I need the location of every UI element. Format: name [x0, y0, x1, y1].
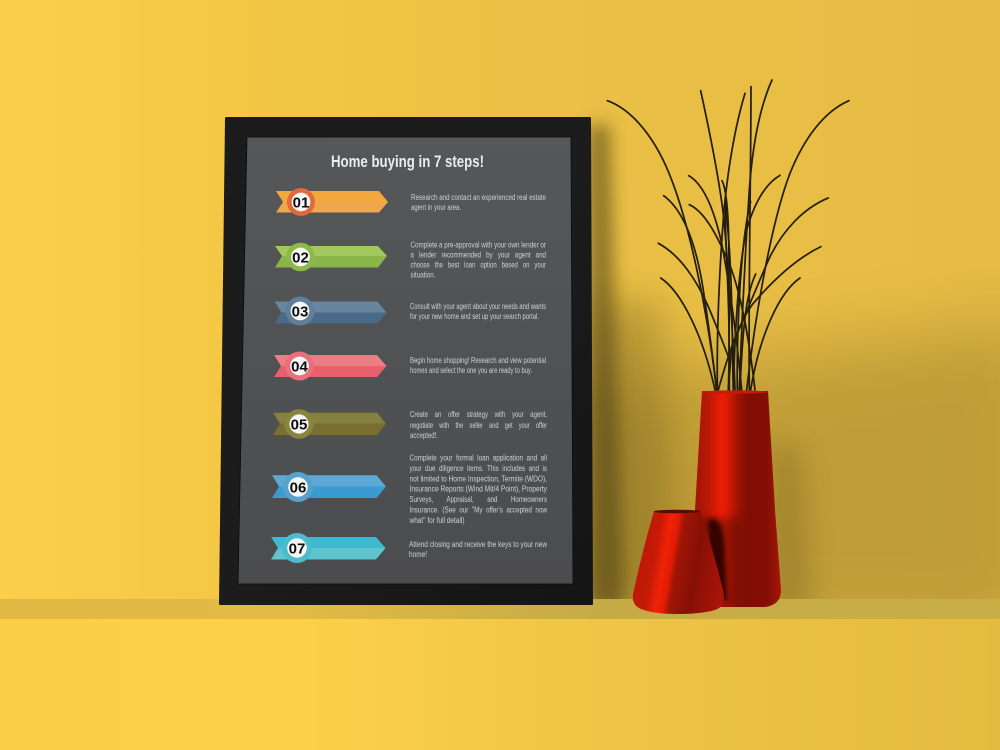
- step 2 text: situation.: [410, 270, 436, 280]
- step 6 text: [409, 454, 547, 525]
- step 3 ribbon: 03: [292, 304, 308, 320]
- step 6 ribbon: 06: [290, 480, 306, 496]
- step 7 ribbon: 07: [289, 540, 305, 558]
- plant stems: [607, 80, 849, 390]
- step 5 text: accepted!.: [410, 431, 438, 440]
- step 6 text: Surveys, Appraisal, and Homeowners: [410, 495, 547, 504]
- title: Home buying in 7 steps!: [331, 152, 484, 171]
- step 5 text: Create an offer strategy with your agent,: [410, 410, 547, 419]
- step 6 text: Insurance. (See our "My offer's accepted now: [410, 506, 547, 514]
- step 5 ribbon: [273, 409, 386, 439]
- step 1 text: [411, 193, 546, 212]
- step 2 ribbon: [275, 243, 387, 271]
- step 6 text: not limited to Home Inspection, Termite (WDO),: [410, 474, 547, 484]
- step 5 text: [410, 410, 547, 440]
- picture frame: [219, 117, 593, 605]
- step 6 ribbon: [272, 472, 386, 502]
- step 7 text: Attend closing and receive the keys to your new: [409, 540, 547, 549]
- step 5 ribbon: 05: [291, 416, 307, 434]
- step 4 text: Begin home shopping! Research and view potential: [410, 356, 546, 365]
- step 2 ribbon: 02: [292, 250, 309, 266]
- step 7 text: home!: [409, 550, 427, 559]
- step 5 text: negotiate with the seller and get your offer: [410, 421, 547, 430]
- step 6 text: Insurance Reports (Wind Mit/4 Point), Property: [410, 484, 547, 494]
- step 3 text: [410, 302, 546, 321]
- wall background: [0, 0, 1000, 600]
- step 4 text: [410, 356, 546, 375]
- step 3 text: for your new home and set up your search portal.: [410, 312, 539, 321]
- step 2 text: choose the best loan option based on your: [410, 260, 546, 270]
- shelf front: [0, 619, 1000, 750]
- step 1 text: Research and contact an experienced real estate: [411, 193, 546, 202]
- step 2 text: a lender recommended by your agent and: [410, 250, 546, 260]
- step 6 text: what" for full detail): [409, 516, 465, 525]
- step 7 ribbon: [271, 533, 386, 563]
- step 6 text: your due diligence items. This includes and is: [410, 464, 547, 473]
- wall shadows: [591, 116, 1000, 599]
- step 4 text: homes and select the one you are ready to buy.: [410, 366, 532, 375]
- step 4 ribbon: 04: [291, 358, 308, 376]
- step 2 text: Complete a pre-approval with your own lender or: [410, 240, 546, 250]
- step 7 text: [409, 540, 547, 559]
- step 6 text: Complete your formal loan application and all: [410, 454, 547, 463]
- step 1 ribbon: [276, 188, 388, 216]
- shelf ledge: [0, 599, 1000, 619]
- step 3 ribbon: [274, 296, 386, 326]
- step 2 text: [410, 240, 546, 280]
- tall red vase: [695, 390, 781, 618]
- step 4 ribbon: [274, 352, 386, 380]
- poster screen: [238, 137, 573, 584]
- small red vase: [633, 510, 724, 614]
- step 1 ribbon: 01: [293, 194, 309, 212]
- step 1 text: agent in your area.: [411, 203, 461, 212]
- step 3 text: Consult with your agent about your needs and wants: [410, 302, 546, 311]
